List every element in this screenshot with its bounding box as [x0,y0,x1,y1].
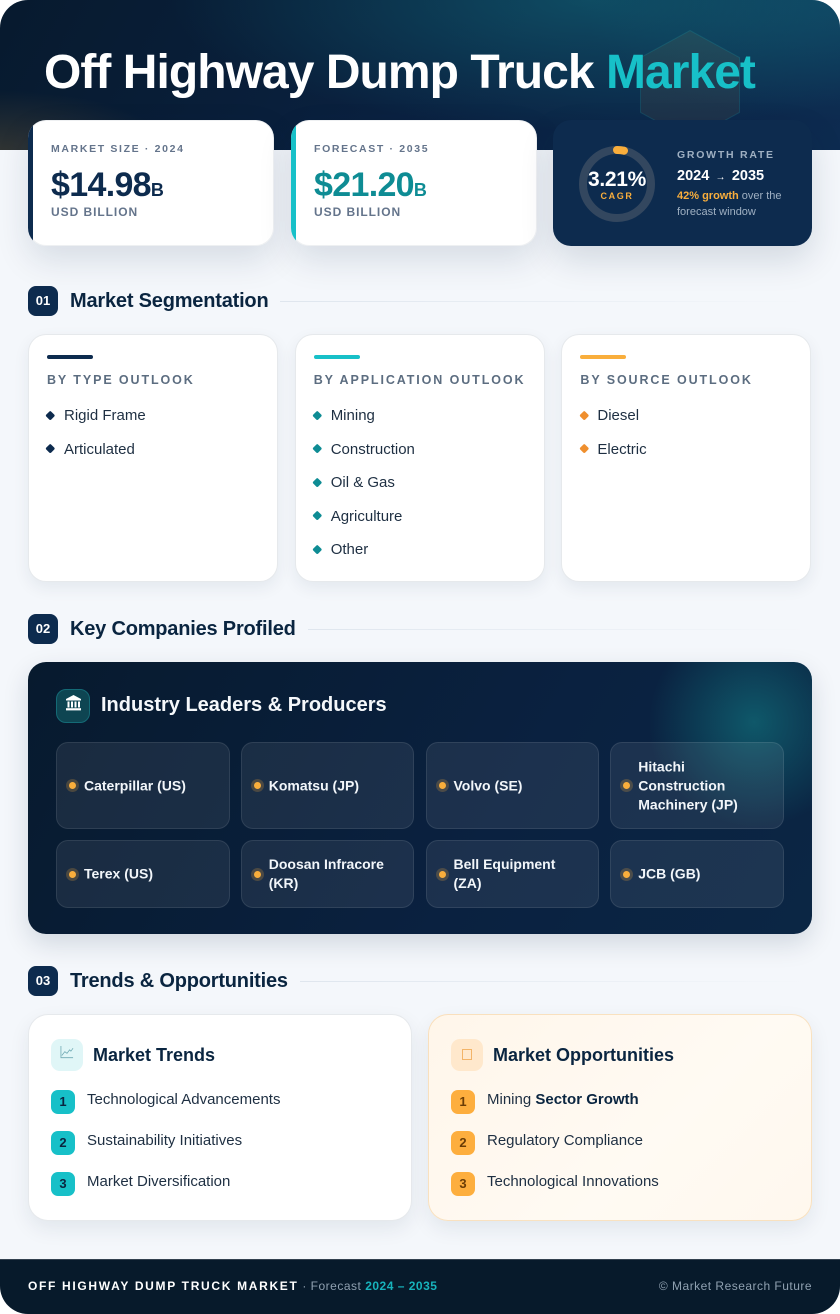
trend 3 [51,1172,75,1196]
footer credit: © Market Research Future [659,1279,812,1293]
footer [0,1259,840,1314]
panel: by source [561,334,811,582]
panel: by application: Other [331,541,368,558]
CAGR label: CAGR [601,191,633,201]
opportunity 2: 2 [459,1135,467,1150]
stat card: market size: USD BILLION [51,205,138,219]
panel: market opportunities: Mining Sector Growth [487,1090,639,1108]
panel: market opportunities [428,1014,812,1221]
decorative hexagon [640,30,740,120]
panel: market trends [28,1014,412,1221]
company: Volvo: Volvo (SE) [454,777,522,793]
section badge 03 [28,966,58,996]
company: Hitachi: Construction [638,777,725,793]
company: Terex: Terex (US) [84,866,153,882]
company: Doosan: (KR) [269,875,298,891]
company: Terex [56,840,230,908]
stat card: forecast: FORECAST · 2035 [314,143,429,155]
panel: by type [28,334,278,582]
growth label: GROWTH RATE [677,148,775,160]
trend 2 [51,1131,75,1155]
stat card: forecast: $21.20B [314,166,427,204]
section badge 02 [28,614,58,644]
opportunity 3: 3 [459,1176,467,1191]
panel: by application: Agriculture [331,508,402,524]
opportunity 1 [451,1090,475,1114]
company: Bell [426,840,599,908]
heading: market opportunities: Market Opportunities [493,1045,674,1065]
trend 1: 1 [59,1094,67,1109]
panel: by application: Oil & Gas [331,474,395,490]
growth note: 42% growth over the [677,190,782,202]
panel: market opportunities: Regulatory Compliance [487,1132,643,1148]
header band [0,0,840,150]
section badge 01 [28,286,58,316]
company: Caterpillar [56,742,230,829]
company: Hitachi: Hitachi [638,758,685,774]
panel: companies [28,662,812,934]
panel: by type: Articulated [64,440,135,458]
section badge 02: 02 [36,621,50,636]
growth note [677,190,782,218]
company: JCB [610,840,784,908]
company: Hitachi: Machinery (JP) [638,796,738,812]
company: Hitachi [610,742,784,829]
heading: market trends: Market Trends [93,1045,215,1065]
company: Doosan [241,840,414,908]
opportunity 2 [451,1131,475,1155]
opportunity 1: 1 [459,1094,467,1109]
stat card: forecast: USD BILLION [314,205,401,219]
panel: market opportunities: Technological Innovations [487,1172,659,1190]
panel: by source: BY SOURCE OUTLOOK [580,372,753,386]
panel: by application [295,334,545,582]
panel: market trends: Technological Advancements [87,1090,280,1108]
growth note: forecast window [677,206,756,218]
panel: by application: BY APPLICATION OUTLOOK [314,372,525,386]
company: Komatsu: Komatsu (JP) [269,777,359,793]
company: Bell: (ZA) [454,875,482,891]
CAGR value: 3.21% [588,168,646,191]
stat card: forecast [291,120,537,246]
section badge 03: 03 [36,973,50,988]
icon: opportunity [451,1039,483,1071]
trend 1 [51,1090,75,1114]
trend 2: 2 [59,1135,67,1150]
panel: by type: Rigid Frame [64,406,146,424]
growth years: → [716,172,726,183]
stat card: growth rate [553,120,812,246]
CAGR ring [579,146,655,222]
company: Volvo [426,742,599,829]
footer title: OFF HIGHWAY DUMP TRUCK MARKET · Forecast 2024 – 2035 [28,1279,437,1293]
panel: by type: BY TYPE OUTLOOK [47,372,195,386]
trend 3: 3 [59,1176,67,1191]
growth years: 2024 2035 [677,168,764,184]
heading: key companies: Key Companies Profiled [70,618,296,640]
section badge 01: 01 [36,293,50,308]
stat card: market size: $14.98B [51,166,164,204]
company: JCB: JCB (GB) [638,866,700,882]
heading: trends: Trends & Opportunities [70,970,288,992]
company: Komatsu [241,742,414,829]
opportunity 3 [451,1172,475,1196]
stat card: market size: MARKET SIZE · 2024 [51,143,185,155]
panel: market trends: Sustainability Initiatives [87,1132,242,1148]
panel: by application: Construction [331,440,415,458]
company: Caterpillar: Caterpillar (US) [84,777,186,793]
heading: industry leaders: Industry Leaders & Producers [101,694,387,716]
heading: market segmentation: Market Segmentation [70,290,268,312]
icon: bank [56,689,90,723]
panel: market trends: Market Diversification [87,1172,230,1190]
panel: by application: Mining [331,406,375,424]
company: Doosan: Doosan Infracore [269,856,384,872]
icon: chart [51,1039,83,1071]
title: Off Highway Dump Truck Market [44,46,755,99]
panel: by source: Electric [597,440,647,458]
company: Bell: Bell Equipment [454,856,555,872]
stat card: market size [28,120,274,246]
panel: by source: Diesel [597,406,639,424]
